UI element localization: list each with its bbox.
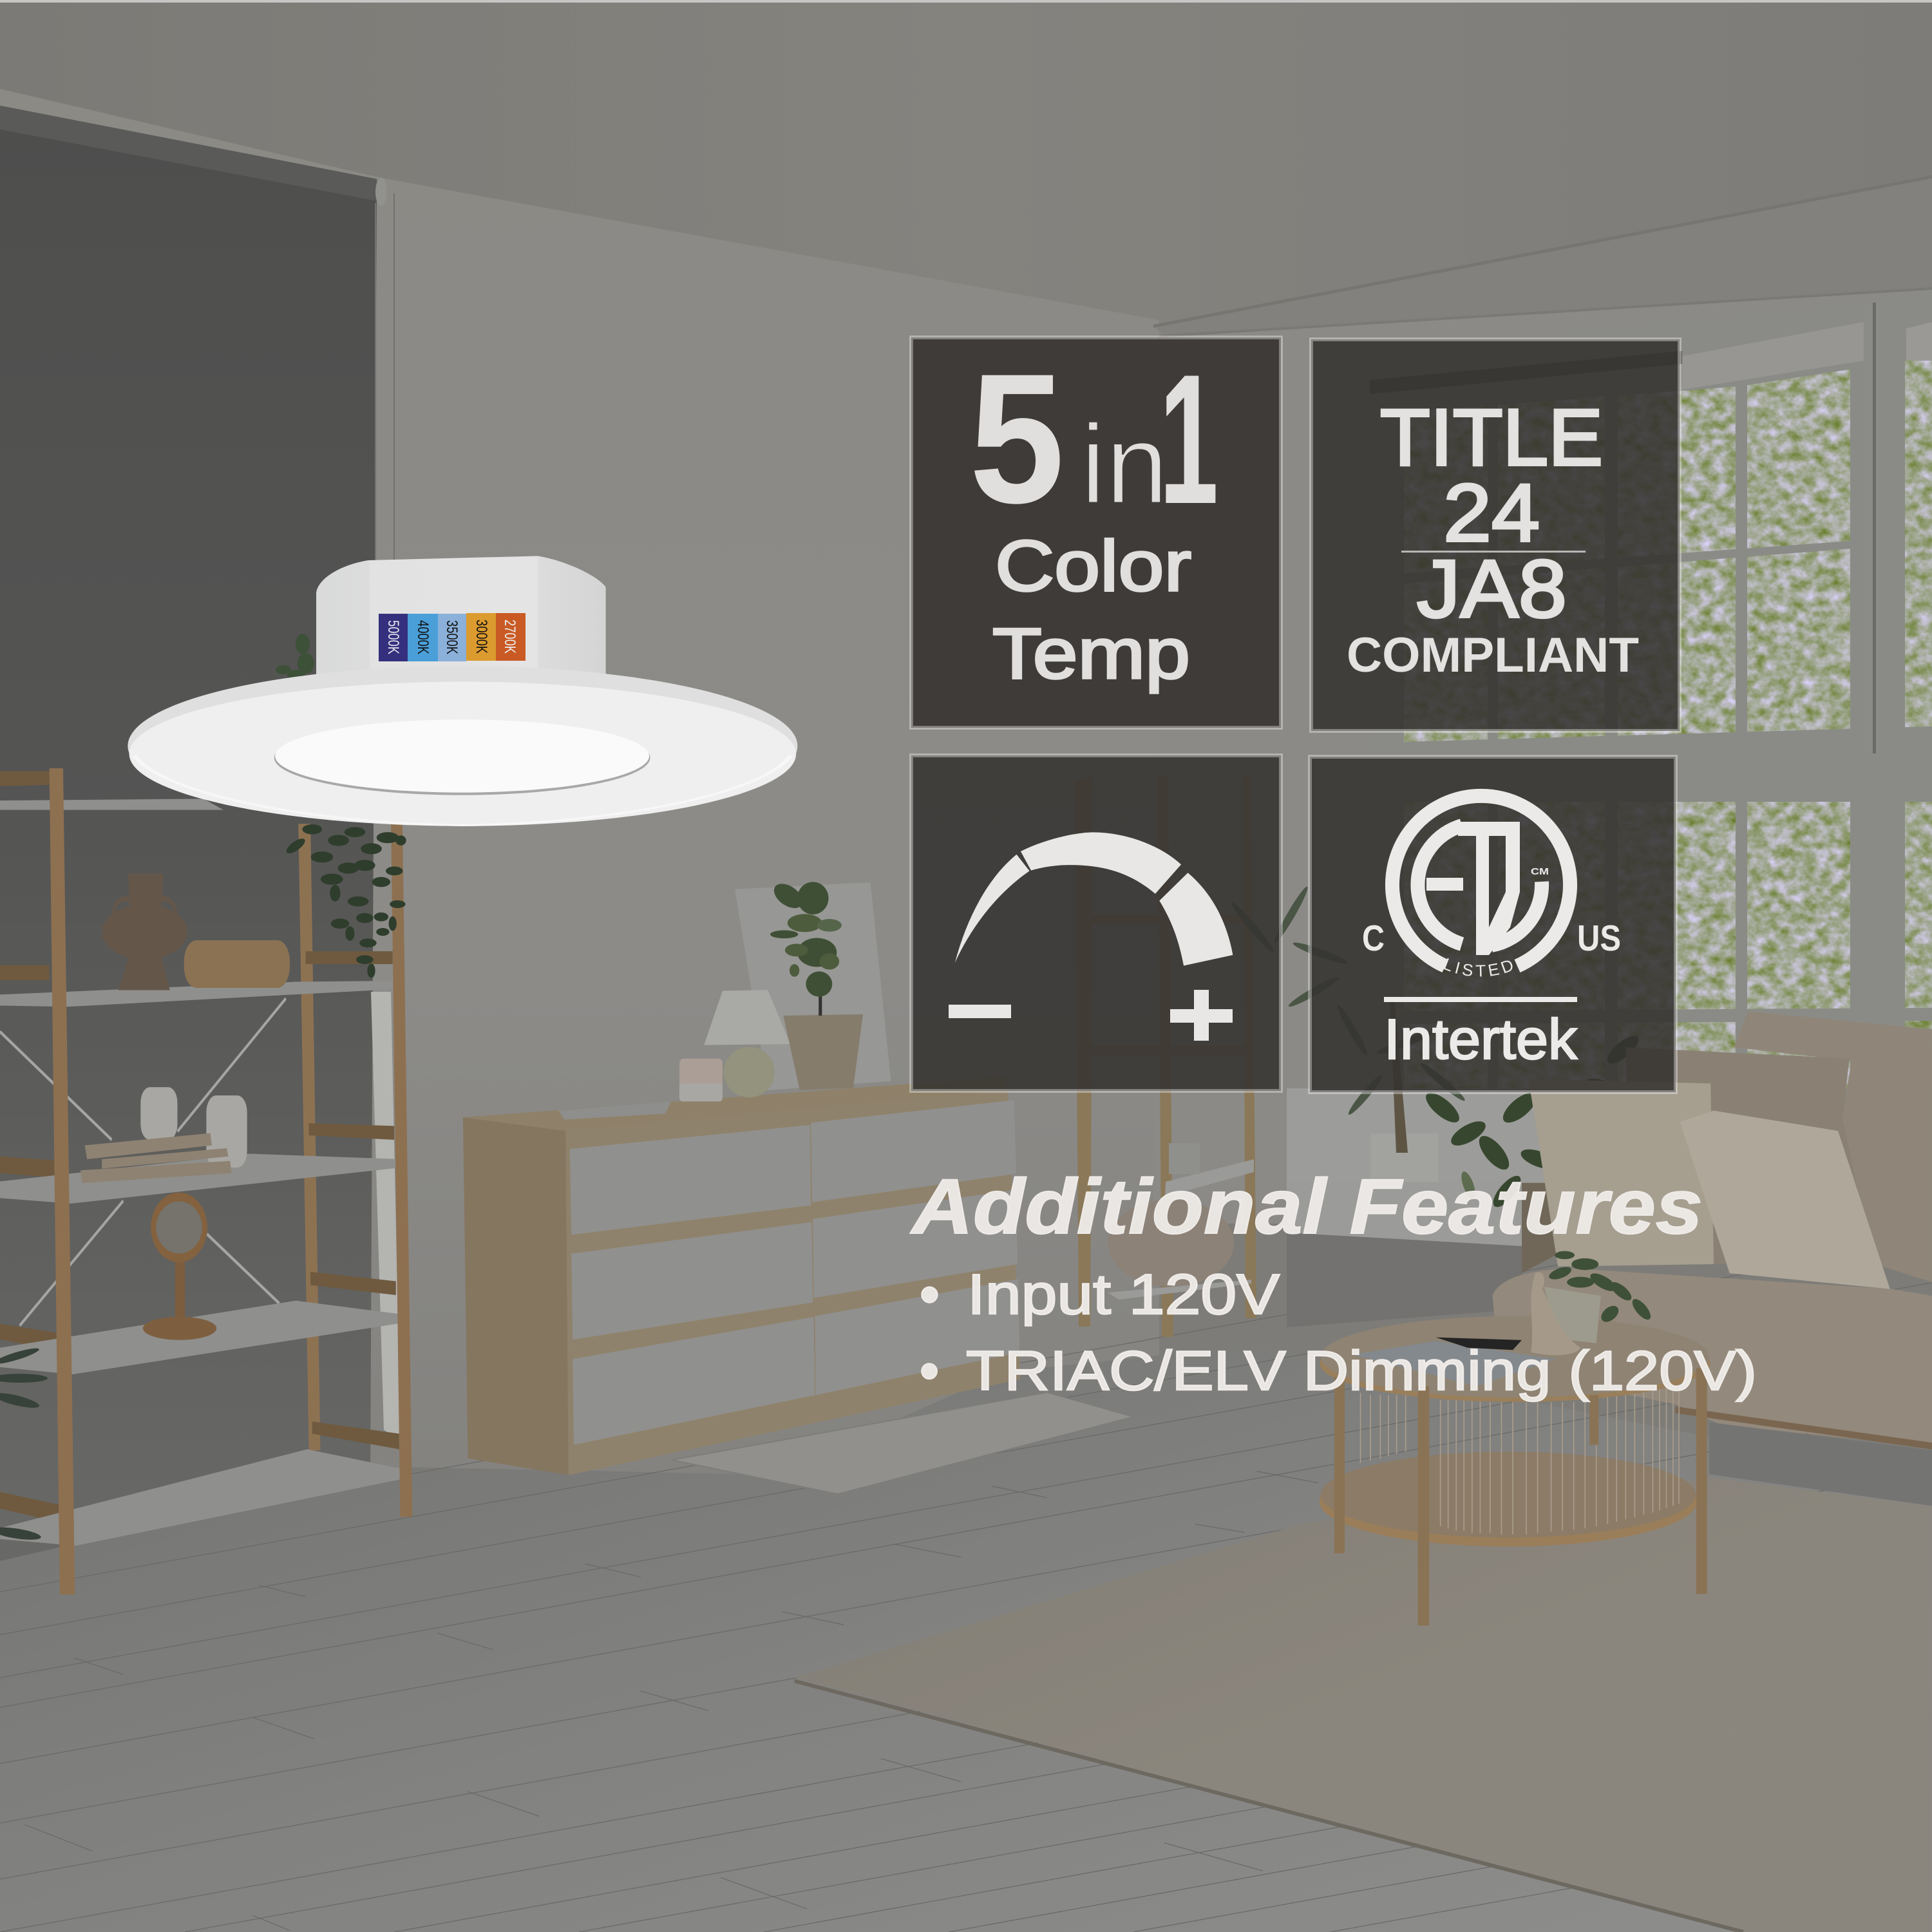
3000K stripe — [466, 613, 496, 661]
white vases — [140, 1087, 247, 1168]
rungs — [0, 771, 399, 1522]
Intertek: Intertek — [1384, 1007, 1578, 1071]
letter E middle arm — [1426, 878, 1463, 891]
letter E arc — [1417, 826, 1462, 944]
tree in planter — [1229, 885, 1467, 1182]
palm leaves — [0, 1345, 48, 1542]
sofa arm — [1522, 1183, 1556, 1273]
CCT label — [379, 613, 526, 661]
minus sign — [949, 1005, 1011, 1018]
figurine — [1531, 1273, 1580, 1355]
plus sign — [1170, 990, 1233, 1041]
small planter on shelf — [1169, 1143, 1200, 1174]
window sill and low wall — [1287, 1088, 1558, 1327]
window roller blind — [1682, 322, 1864, 390]
logo rule — [1384, 997, 1577, 1002]
fraction rule — [1401, 551, 1586, 553]
title text: TITLE — [1380, 393, 1603, 482]
bullet: input: Input 120V — [967, 1262, 1280, 1326]
phone — [1436, 1338, 1522, 1350]
plant pot — [783, 1014, 863, 1090]
planter — [1544, 1287, 1601, 1343]
table legs — [1334, 1368, 1707, 1625]
5000K stripe — [379, 614, 408, 661]
temp label: Temp — [992, 614, 1190, 694]
panel: Title 24 JA8 compliant — [1311, 339, 1680, 731]
big 1: 1 — [1159, 336, 1218, 542]
c mark: C — [1362, 918, 1385, 959]
leafy plant behind sofa — [1421, 1032, 1643, 1224]
woven bowl — [184, 940, 290, 988]
big 5: 5 — [969, 335, 1065, 542]
4000K stripe: 4000K — [414, 620, 431, 654]
corduroy pillow — [1529, 1079, 1714, 1266]
blind bracket — [375, 178, 387, 206]
blind cords — [375, 193, 394, 567]
top edge highlight — [0, 0, 1932, 3]
fiddle leaf plant — [770, 879, 842, 1016]
letter L arc — [1492, 882, 1542, 945]
sofa and coffee table — [1320, 1011, 1932, 1625]
us mark: US — [1577, 918, 1621, 959]
rug — [795, 1478, 1932, 1932]
floor — [0, 1346, 1932, 1932]
blackout blind on left wall — [0, 106, 377, 1571]
shelf boards — [0, 799, 407, 1546]
4000K stripe — [408, 614, 438, 661]
3500K stripe — [438, 614, 466, 661]
housing — [316, 556, 606, 678]
compliant text: COMPLIANT — [1347, 628, 1639, 683]
left back wall — [0, 89, 1159, 1578]
string cage — [1361, 1381, 1679, 1534]
cream pillow — [1680, 1110, 1890, 1289]
LISTED: LISTED — [1444, 958, 1512, 976]
LED lens — [275, 719, 649, 793]
window panes with foliage — [1370, 290, 1932, 1224]
heading: Additional Features — [910, 1162, 1703, 1250]
letter L — [1489, 824, 1520, 955]
table lamp — [704, 990, 790, 1097]
hanging plant — [285, 824, 406, 978]
table lower shelf — [1320, 1452, 1697, 1546]
blind roller — [0, 106, 380, 202]
bullet: input: • — [920, 1262, 940, 1326]
24 text: 24 — [1443, 467, 1540, 558]
panel: ETL listed — [1308, 755, 1678, 1094]
bullet: dimming: TRIAC/ELV Dimming (120V) — [966, 1340, 1757, 1402]
dresser top — [463, 1077, 1007, 1131]
rim side band — [128, 666, 797, 826]
shelf boards — [1165, 1159, 1254, 1197]
dresser front — [565, 1090, 1020, 1475]
curtain sliver — [371, 992, 401, 1443]
LED lens shadow — [274, 721, 650, 795]
dresser with decor — [463, 879, 1020, 1475]
left bamboo shelf — [0, 768, 412, 1595]
plant behind downlight housing — [276, 634, 314, 683]
in: in — [1081, 402, 1168, 527]
JA8 text: JA8 — [1417, 543, 1567, 634]
table top — [1320, 1316, 1710, 1402]
sofa left back cushion — [1625, 1047, 1874, 1264]
dresser body — [463, 1117, 569, 1475]
panel: 5 in 1 color temp — [911, 335, 1281, 728]
back post — [298, 824, 320, 1450]
floor plank lines — [0, 1197, 1932, 1932]
tabletop mirror — [143, 1197, 216, 1340]
front posts — [50, 768, 75, 1595]
table plant — [1548, 1251, 1654, 1325]
2700K stripe — [496, 613, 526, 661]
window frame bars — [1370, 290, 1932, 1224]
drawers — [570, 1100, 1019, 1445]
door mat — [672, 1392, 1133, 1494]
ceiling — [0, 0, 1932, 644]
color label: Color — [995, 526, 1191, 606]
back wire braces — [0, 998, 286, 1325]
rim lower highlight — [135, 755, 791, 825]
clay vase — [102, 874, 187, 990]
sofa back cushion — [1734, 1011, 1932, 1282]
sofa seat — [1492, 1269, 1932, 1447]
shadow under sofa — [1709, 1423, 1932, 1506]
rim face — [129, 682, 796, 826]
CM mark: CM — [1531, 866, 1549, 877]
right wall and ceiling beam — [1153, 175, 1932, 1224]
2700K stripe: 2700K — [501, 620, 518, 654]
sofa wood base — [1676, 1406, 1932, 1450]
outer ring — [1392, 796, 1570, 966]
ETL logo — [1362, 788, 1621, 976]
knit basket — [1108, 1199, 1234, 1287]
second shelf unit behind panels — [1075, 776, 1256, 1337]
tablet — [558, 1101, 671, 1119]
bullet: dimming: • — [920, 1340, 939, 1402]
5000K stripe: 5000K — [384, 620, 402, 654]
panel: dimmable icon — [911, 755, 1281, 1091]
magazine — [1352, 1341, 1556, 1386]
3500K stripe: 3500K — [443, 620, 460, 654]
3000K stripe: 3000K — [473, 620, 490, 654]
letter T — [1458, 822, 1520, 955]
books — [80, 1133, 232, 1183]
art print — [735, 882, 891, 1090]
product: LED downlight — [128, 556, 797, 826]
cup — [679, 1059, 723, 1101]
additional features text block — [910, 1162, 1757, 1402]
dimmer arc icon — [955, 832, 1233, 966]
